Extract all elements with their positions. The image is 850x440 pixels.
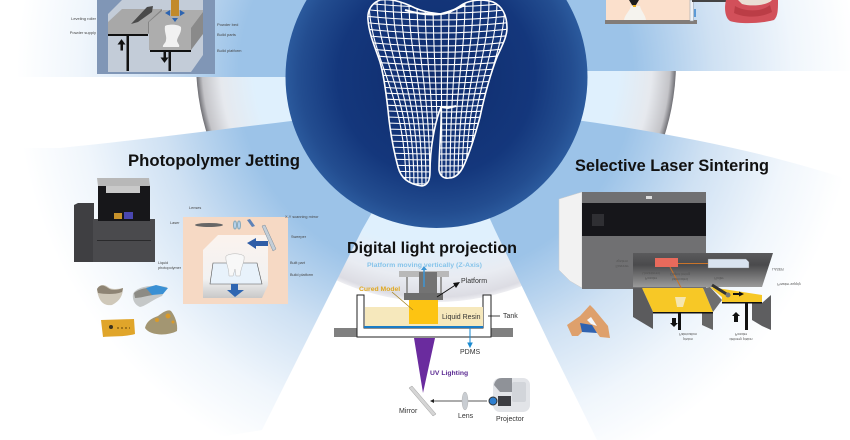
lenses — [234, 221, 236, 229]
peach vat — [606, 0, 690, 21]
central dark blue disc — [286, 0, 588, 228]
print head — [629, 0, 639, 6]
dental model 4 — [145, 310, 177, 334]
dental model 3 — [101, 319, 135, 337]
SLS printer side — [559, 192, 582, 288]
projector — [489, 378, 530, 412]
tank outline — [357, 295, 491, 337]
blue z-axis arrow — [423, 269, 425, 287]
mirrored labels: Unsintered — [642, 271, 660, 275]
sweeper arrow — [247, 238, 268, 249]
SLS printer body — [582, 192, 706, 289]
dental model — [567, 305, 610, 338]
panel: photopolymer jetting content — [74, 178, 319, 337]
mirror — [409, 386, 436, 416]
laser beam — [670, 264, 708, 295]
laser bar — [195, 223, 223, 227]
red powder block — [655, 258, 678, 267]
piston lines — [653, 302, 762, 330]
arrow: tank — [488, 315, 500, 317]
label: powder supply: Powder supply — [70, 30, 96, 35]
mirrored labels: Roller — [714, 276, 724, 280]
piston arrows — [670, 312, 740, 327]
dental gum model — [725, 0, 778, 23]
label: powder bed: Powder bed — [217, 22, 238, 27]
label: cured model: Cured Model — [359, 286, 400, 293]
printed part — [163, 25, 181, 47]
light arrow — [433, 400, 487, 402]
label: mirror: Mirror — [399, 408, 418, 415]
scheme labels: Lenses — [189, 206, 201, 210]
laser unit — [708, 259, 749, 268]
mirrored labels: delivery piston — [730, 337, 752, 341]
scheme labels: Sweeper — [291, 235, 307, 239]
label: UV lighting: UV Lighting — [430, 370, 468, 377]
label: projector: Projector — [496, 416, 525, 423]
right gray wall — [752, 295, 771, 330]
label: platform: Platform — [461, 278, 487, 285]
lens — [462, 392, 468, 410]
scheme labels: Liquid — [158, 261, 168, 265]
platform assembly — [399, 271, 449, 300]
panel: binder jetting diagram top left — [70, 0, 242, 74]
scanning mirror — [247, 219, 255, 227]
printer tower — [74, 203, 94, 262]
mirrored labels: Scanner — [615, 264, 629, 268]
white tooth — [226, 254, 244, 276]
connector bar — [692, 0, 726, 2]
right bed yellow — [710, 287, 762, 302]
mirrored labels: LASER — [772, 267, 784, 271]
mirrored labels: Object being — [670, 272, 690, 276]
build strip — [605, 20, 697, 24]
panel: top right stereolithography diagram — [605, 0, 778, 24]
sweeper — [262, 225, 276, 251]
mirrored labels: piston — [683, 337, 693, 341]
print head — [171, 0, 179, 16]
printer open chamber — [98, 185, 150, 221]
blue motion arrows — [165, 10, 185, 22]
scheme labels: Laser — [170, 221, 180, 225]
platform down arrow — [227, 284, 244, 297]
large pale circle behind the tooth — [196, 71, 676, 302]
mirrored labels: fabricated — [672, 277, 688, 281]
UV cone — [414, 338, 435, 393]
printer lid — [97, 178, 150, 186]
middle gray wall — [702, 313, 713, 330]
peach schematic box — [183, 217, 288, 304]
panel: top left blue wedge — [0, 0, 436, 77]
panel: right blue wedge — [436, 100, 850, 440]
label: leveling roller: Leveling roller — [71, 16, 97, 21]
arrow: PDMS — [468, 328, 472, 347]
arrow: platform — [437, 284, 457, 297]
label: build platform: Build platform — [217, 48, 242, 53]
SLS logo strip — [646, 196, 652, 199]
icon: wireframe tooth — [365, 0, 510, 186]
mirrored labels: system — [616, 259, 628, 263]
scheme labels: Build platform — [290, 273, 313, 277]
left powder block — [108, 9, 162, 34]
scheme labels: photopolymer — [158, 266, 182, 270]
mirrored labels — [615, 259, 801, 341]
heading: selective laser sintering: Selective Laser Sintering — [575, 156, 769, 175]
side column — [690, 0, 694, 21]
liquid resin — [365, 307, 483, 326]
mirrored labels: Fabrication — [679, 332, 697, 336]
right powder block — [149, 10, 203, 50]
heading: photopolymer jetting: Photopolymer Jetting — [128, 151, 300, 170]
heading: digital light projection: Digital light projection — [347, 240, 517, 257]
SLS door screen — [592, 214, 604, 226]
label: lens: Lens — [458, 413, 474, 420]
leveling roller — [131, 6, 153, 24]
label: liquid resin: Liquid Resin — [442, 314, 481, 321]
arrows up and down — [118, 40, 168, 62]
label: PDMS: PDMS — [460, 349, 481, 356]
blue scale mark — [694, 9, 696, 17]
scheme labels: X-Y scanning mirror — [285, 215, 319, 219]
diagram background — [97, 0, 215, 74]
panel: selective laser sintering content — [559, 192, 801, 341]
build platform — [210, 263, 262, 284]
cured model — [409, 300, 438, 324]
label: build parts: Build parts — [217, 32, 236, 37]
mirrored labels: Powder — [735, 332, 748, 336]
glass box — [108, 0, 203, 72]
mirrored labels: Powder supply — [777, 282, 801, 286]
panel: digital light projection diagram — [334, 262, 530, 423]
scheme labels: Built part — [290, 261, 306, 265]
left gray wall — [633, 288, 653, 329]
label: tank: Tank — [503, 313, 518, 320]
scheme labels — [158, 206, 319, 277]
mirrored labels: Powder — [645, 276, 658, 280]
SLS black panel — [582, 203, 706, 236]
panel: top right blue wedge — [436, 0, 850, 71]
printed part — [624, 6, 646, 20]
roller — [712, 285, 728, 295]
SLS gantry — [633, 253, 773, 287]
dental model 1 — [97, 285, 123, 305]
left bed yellow — [642, 288, 713, 312]
sintered part — [675, 297, 686, 307]
panel: left blue wedge — [0, 100, 436, 440]
base plate — [334, 328, 513, 337]
label: platform moving: Platform moving vertically (Z-Axis) — [367, 262, 482, 269]
pistons — [108, 34, 191, 71]
coloured parts inside printer — [114, 213, 122, 219]
PDMS layer — [364, 326, 483, 328]
arrow: cured model — [392, 292, 413, 310]
build cube — [203, 235, 268, 298]
dental model 2 — [133, 285, 168, 307]
printer body — [93, 219, 155, 262]
